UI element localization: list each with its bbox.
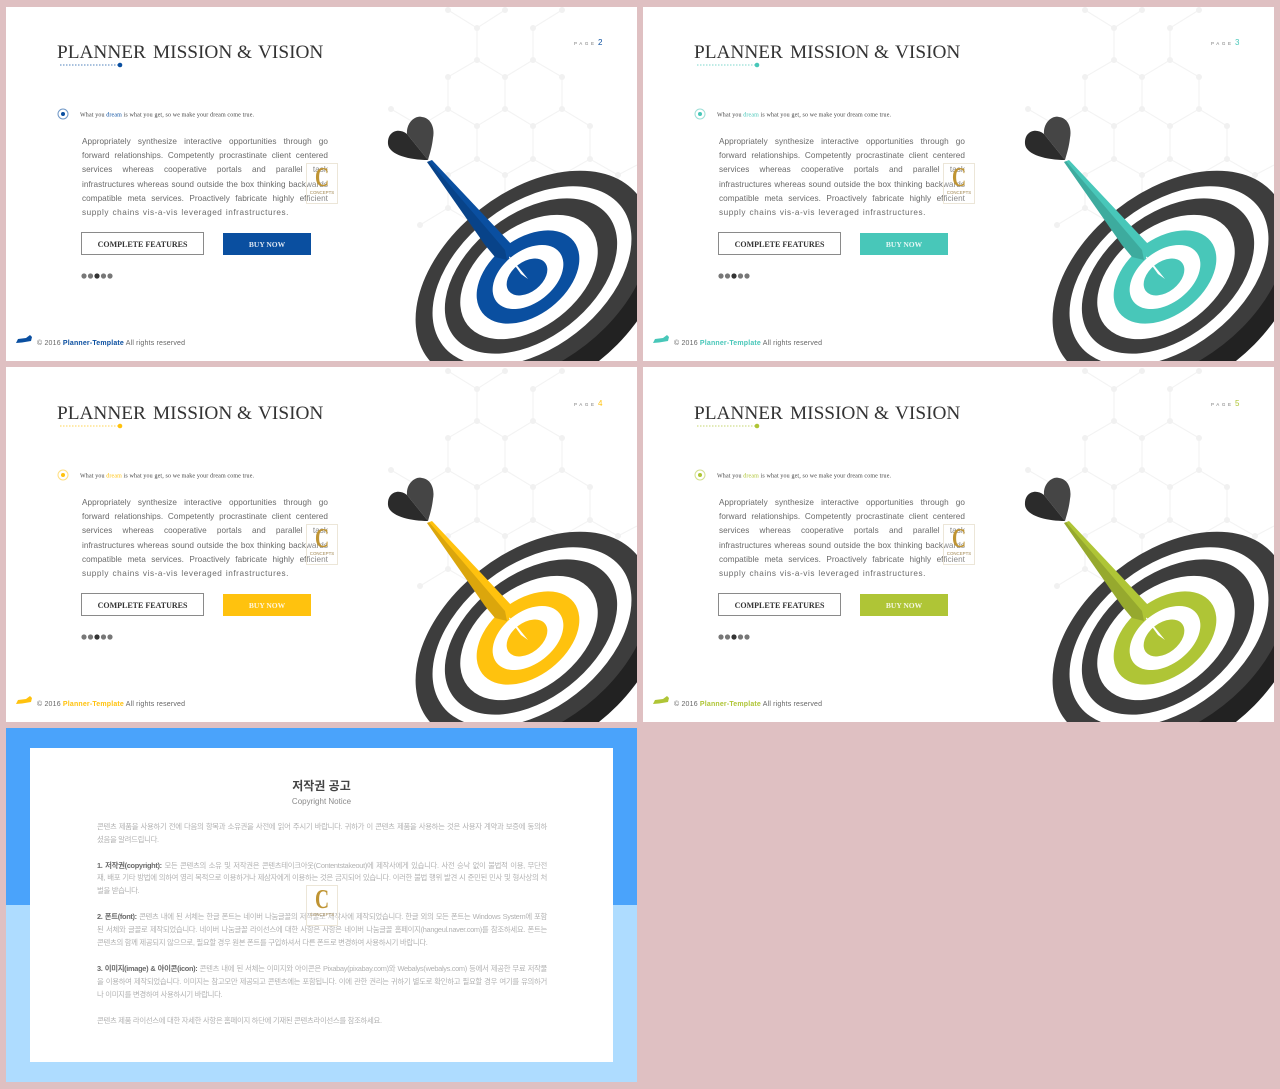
body paragraph: forward relationships. Competently procrastinate client centered — [82, 151, 328, 160]
title underline — [697, 424, 759, 428]
body paragraph: forward relationships. Competently procrastinate client centered — [719, 151, 965, 160]
title: MISSION — [153, 403, 232, 424]
body paragraph: Appropriately synthesize interactive opportunities through go — [82, 137, 328, 146]
pagination dots — [718, 634, 750, 640]
icon: dart — [388, 478, 528, 640]
body paragraph: infrastructures whereas sound outside the box thinking backwards — [719, 180, 965, 189]
panel: yellow slide page 4 — [6, 368, 637, 722]
body paragraph: services whereas cooperative portals and parallel task — [82, 526, 328, 535]
icon: tagline bullet — [695, 109, 705, 119]
closing line: 콘텐츠 제품 라이선스에 대한 자세한 사항은 홈페이지 하단에 기재된 콘텐츠라이선스를 참조하세요. — [97, 1016, 382, 1025]
page number: 5 — [1235, 399, 1240, 408]
page number: 4 — [598, 399, 603, 408]
icon: dartboard — [375, 127, 703, 444]
title underline — [60, 63, 122, 67]
tagline: What you dream is what you get, so we make your dream come true. — [80, 474, 254, 480]
title: & — [874, 403, 889, 424]
title underline — [60, 424, 122, 428]
watermark: C — [315, 884, 329, 914]
title: MISSION — [790, 42, 869, 63]
panel: blue slide page 2 — [6, 7, 637, 361]
button: buy now: BUY NOW — [249, 240, 286, 249]
body paragraph: services whereas cooperative portals and parallel task — [82, 165, 328, 174]
title: VISION — [895, 403, 960, 424]
icon: dart — [1025, 117, 1165, 279]
page number — [1211, 38, 1240, 47]
button: complete features: COMPLETE FEATURES — [98, 601, 188, 610]
body paragraph — [82, 498, 328, 578]
button: complete features — [718, 232, 840, 254]
body paragraph: supply chains vis-a-vis leveraged infrastructures. — [82, 569, 289, 578]
icon: shoe logo — [16, 335, 32, 343]
body paragraph: supply chains vis-a-vis leveraged infrastructures. — [719, 569, 926, 578]
watermark: CONCEPTS — [947, 551, 971, 556]
watermark — [943, 163, 975, 204]
tagline: What you dream is what you get, so we make your dream come true. — [717, 474, 892, 480]
background hexagon pattern — [1025, 368, 1274, 589]
pagination dots — [81, 634, 113, 640]
body paragraph: Appropriately synthesize interactive opportunities through go — [719, 498, 965, 507]
section 2 font: 콘텐츠의 함께 제공되지 않으므로, 필요할 경우 원본 폰트를 구입하셔서 다른 폰트로 변경하여 사용하시기 바랍니다. — [97, 938, 428, 947]
body paragraph: compatible meta services. Proactively fabricate highly efficient — [719, 555, 965, 564]
page number — [574, 38, 603, 47]
body paragraph: infrastructures whereas sound outside the box thinking backwards — [719, 541, 965, 550]
body paragraph: supply chains vis-a-vis leveraged infrastructures. — [719, 208, 926, 217]
title: PLANNER — [694, 403, 783, 424]
title: & — [237, 42, 252, 63]
section 2 font — [97, 912, 547, 947]
body paragraph — [82, 137, 328, 217]
watermark — [943, 524, 975, 565]
watermark: CONCEPTS — [310, 551, 334, 556]
button: buy now — [223, 233, 311, 255]
body paragraph: infrastructures whereas sound outside the box thinking backwards — [82, 180, 328, 189]
icon: dart — [1025, 478, 1165, 640]
section 1 copyright: 벌을 받습니다. — [97, 886, 139, 895]
body paragraph: services whereas cooperative portals and parallel task — [719, 526, 965, 535]
footer copyright: © 2016 Planner-Template All rights reserved — [674, 339, 822, 347]
section 3 image and icon: 3. 이미지(image) & 아이콘(icon): 콘텐츠 내에 된 서체는 이미지와 아이콘은 Pixabay(pixabay.com)와 Webalys(webalys.com) 등에서 제공한 무료 저작물 — [97, 964, 547, 973]
title underline — [697, 63, 759, 67]
watermark: C — [315, 523, 329, 553]
body paragraph: compatible meta services. Proactively fabricate highly efficient — [719, 194, 965, 203]
page number — [574, 399, 603, 408]
icon: dart — [388, 117, 528, 279]
page number — [1211, 399, 1240, 408]
watermark — [306, 163, 338, 204]
icon: shoe logo — [653, 335, 669, 343]
tagline: What you dream is what you get, so we make your dream come true. — [80, 112, 254, 118]
background hexagon pattern — [388, 7, 637, 228]
body paragraph: services whereas cooperative portals and parallel task — [719, 165, 965, 174]
notice intro: 셨음을 알려드립니다. — [97, 835, 159, 844]
title: MISSION — [790, 403, 869, 424]
button: complete features — [718, 594, 840, 616]
section 3 image and icon: 나 이미지를 변경하여 사용하시기 바랍니다. — [97, 990, 222, 999]
title: VISION — [895, 42, 960, 63]
page number: 3 — [1235, 38, 1240, 47]
body paragraph: supply chains vis-a-vis leveraged infrastructures. — [82, 208, 289, 217]
body paragraph: compatible meta services. Proactively fabricate highly efficient — [82, 555, 328, 564]
slide artwork and single-line text — [653, 368, 1274, 722]
background hexagon pattern — [388, 368, 637, 589]
page number: PAGE — [574, 402, 594, 407]
page number: PAGE — [1211, 41, 1231, 46]
title: VISION — [258, 403, 323, 424]
watermark — [306, 524, 338, 565]
section 3 image and icon — [97, 964, 547, 999]
body paragraph: Appropriately synthesize interactive opportunities through go — [82, 498, 328, 507]
footer copyright: © 2016 Planner-Template All rights reserved — [37, 339, 185, 347]
section 2 font: 된 서체와 글꼴로 제작되었습니다. 네이버 나눔글꼴 라이선스에 대한 사항은 사항은 네이버 나눔글꼴 홈페이지(hangeul.naver.com)를 참조하세요. 폰트는 — [97, 925, 547, 934]
title: MISSION — [153, 42, 232, 63]
page number: 2 — [598, 38, 603, 47]
watermark: C — [952, 523, 966, 553]
title: PLANNER — [57, 403, 146, 424]
section 1 copyright: 1. 저작권(copyright): 모든 콘텐츠의 소유 및 저작권은 콘텐츠테이크아웃(Contentstakeout)에 제작사에게 있습니다. 사전 승낙 없이 불법적 이용, 무단전 — [97, 861, 547, 870]
icon: dartboard — [1012, 488, 1280, 805]
icon: tagline bullet — [58, 470, 68, 480]
page number: PAGE — [1211, 402, 1231, 407]
notice intro — [97, 822, 548, 844]
button: complete features: COMPLETE FEATURES — [735, 240, 825, 249]
page number: PAGE — [574, 41, 594, 46]
pagination dots — [81, 273, 113, 279]
section 1 copyright — [97, 861, 547, 895]
body paragraph: infrastructures whereas sound outside the box thinking backwards — [82, 541, 328, 550]
tagline: What you dream is what you get, so we make your dream come true. — [717, 112, 892, 118]
notice card — [30, 748, 613, 1062]
body paragraph — [719, 137, 965, 217]
slide artwork and single-line text — [653, 7, 1274, 361]
watermark: CONCEPTS — [947, 190, 971, 195]
panel: copyright notice — [6, 728, 637, 1082]
body paragraph: compatible meta services. Proactively fabricate highly efficient — [82, 194, 328, 203]
section 3 image and icon: 을 이용하여 제작되었습니다. 이미지는 참고모만 제공되고 콘텐츠에는 포함됩니다. 이에 관한 권리는 귀하기 별도로 확인하고 필요할 경우 여기를 유의하거 — [97, 977, 547, 986]
notice intro: 콘텐츠 제품을 사용하기 전에 다음의 항목과 소유권을 사전에 읽어 주시기 바랍니다. 귀하가 이 콘텐츠 제품을 사용하는 것은 사용자 계약과 보증에 동의하 — [97, 822, 547, 831]
button: complete features — [82, 232, 204, 254]
body paragraph: Appropriately synthesize interactive opportunities through go — [719, 137, 965, 146]
icon: dartboard — [375, 488, 703, 805]
icon: shoe logo — [16, 696, 32, 704]
body paragraph: forward relationships. Competently procrastinate client centered — [82, 512, 328, 521]
section 1 copyright: 재, 배포 기타 방법에 의하여 영리 목적으로 이용하거나 제삼자에게 이용하는 것은 금지되어 있습니다. 이러한 불법 행위 발견 시 준민된 민사 및 형사상의 처 — [97, 873, 547, 882]
footer copyright: © 2016 Planner-Template All rights reserved — [37, 700, 185, 708]
icon: tagline bullet — [58, 109, 68, 119]
icon: tagline bullet — [695, 470, 705, 480]
button: buy now: BUY NOW — [886, 601, 923, 610]
watermark: C — [315, 162, 329, 192]
watermark — [306, 885, 338, 926]
slide artwork and single-line text — [16, 368, 637, 722]
button: complete features: COMPLETE FEATURES — [98, 240, 188, 249]
icon: shoe logo — [653, 696, 669, 704]
title: PLANNER — [694, 42, 783, 63]
button: complete features — [82, 594, 204, 616]
watermark: CONCEPTS — [310, 190, 334, 195]
icon: dartboard — [1012, 127, 1280, 444]
slide artwork and single-line text — [16, 7, 637, 361]
notice subtitle: Copyright Notice — [292, 797, 351, 806]
watermark: C — [952, 162, 966, 192]
title: & — [237, 403, 252, 424]
watermark: CONCEPTS — [310, 912, 334, 917]
panel: teal slide page 3 — [643, 7, 1274, 361]
button: buy now — [860, 594, 948, 616]
button: buy now — [860, 233, 948, 255]
title: & — [874, 42, 889, 63]
body paragraph: forward relationships. Competently procrastinate client centered — [719, 512, 965, 521]
background hexagon pattern — [1025, 7, 1274, 228]
button: buy now: BUY NOW — [249, 601, 286, 610]
title: VISION — [258, 42, 323, 63]
footer copyright: © 2016 Planner-Template All rights reserved — [674, 700, 822, 708]
body paragraph — [719, 498, 965, 578]
panel: green slide page 5 — [643, 368, 1274, 722]
button: buy now — [223, 594, 311, 616]
notice title: 저작권 공고 — [292, 779, 351, 793]
title: PLANNER — [57, 42, 146, 63]
section 2 font: 2. 폰트(font): 콘텐츠 내에 된 서체는 한글 폰트는 네이버 나눔글꼴의 저작물로 제작사에 제작되었습니다. 한글 외의 모든 폰트는 Windows System에 포함 — [97, 912, 547, 921]
button: complete features: COMPLETE FEATURES — [735, 601, 825, 610]
button: buy now: BUY NOW — [886, 240, 923, 249]
pagination dots — [718, 273, 750, 279]
